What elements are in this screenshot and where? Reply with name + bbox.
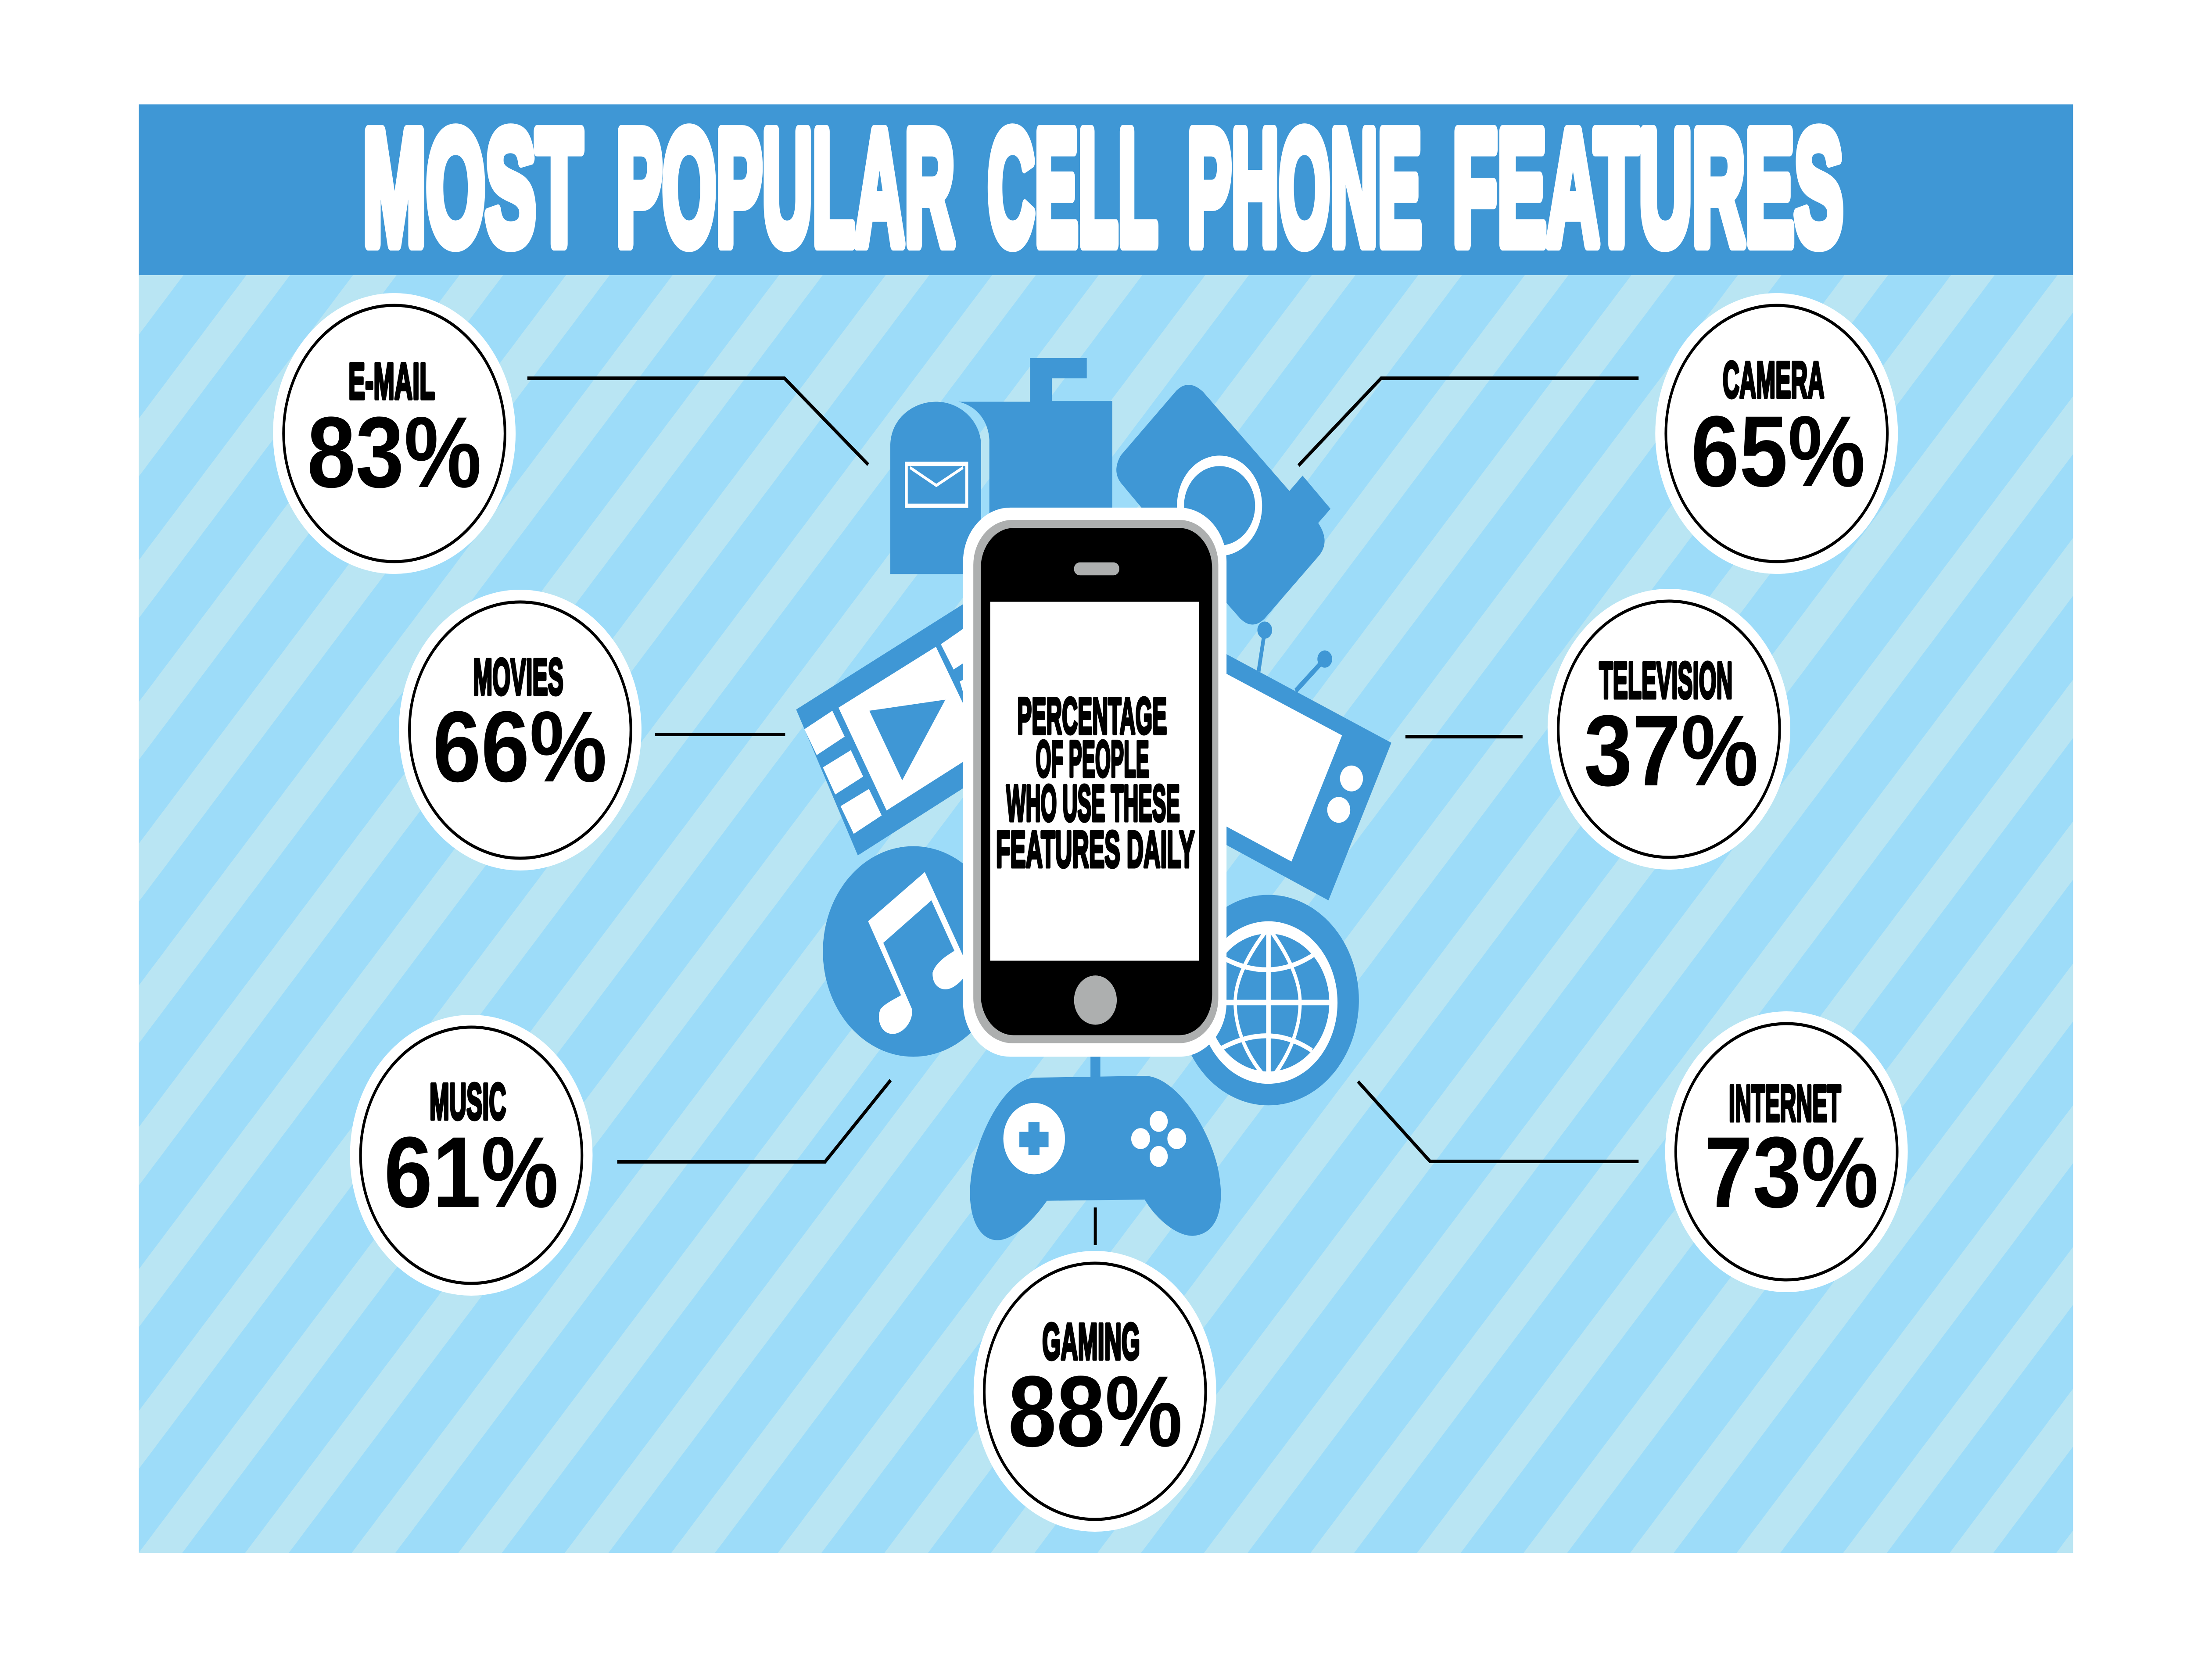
badge: e-mail 83%: [273, 293, 516, 574]
icon: television: [1219, 621, 1391, 900]
title: [363, 96, 1843, 279]
badge: gaming 88%: 88%: [1008, 1354, 1183, 1468]
phone: [963, 508, 1226, 1057]
header banner with title: [139, 96, 2073, 279]
phone screen text: PERCENTAGE: [1017, 688, 1167, 745]
badge: television 37%: 37%: [1584, 694, 1758, 807]
icon: music note: [823, 846, 1004, 1057]
icon: globe: [1178, 895, 1359, 1105]
connector lines: [527, 378, 1638, 1245]
title: CELL: [988, 96, 1158, 279]
badge: camera 65%: 65%: [1691, 394, 1865, 508]
title: MOST: [363, 96, 582, 279]
badge: e-mail 83%: 83%: [307, 395, 481, 509]
badge: gaming 88%: [974, 1251, 1216, 1532]
badge: television 37%: TELEVISION: [1599, 652, 1733, 709]
badge: television 37%: [1548, 589, 1790, 870]
central illustration: icons and phone: [796, 358, 1391, 1240]
phone screen text: OF PEOPLE: [1036, 731, 1149, 788]
panel: striped background: [139, 275, 2073, 1553]
title: FEATURES: [1452, 96, 1843, 279]
title: POPULAR: [616, 96, 955, 279]
badge: internet 73%: INTERNET: [1729, 1075, 1841, 1132]
badge: movies 66%: [399, 590, 642, 870]
badge: music 61%: MUSIC: [430, 1073, 506, 1131]
badge: internet 73%: [1665, 1011, 1908, 1292]
phone screen text: WHO USE THESE: [1006, 775, 1180, 832]
badge: music 61%: 61%: [384, 1115, 559, 1229]
badge: internet 73%: 73%: [1704, 1115, 1879, 1229]
phone screen text: [996, 688, 1194, 878]
badge: e-mail 83%: E-MAIL: [348, 353, 435, 410]
badge: camera 65%: [1655, 293, 1898, 574]
phone screen text: FEATURES DAILY: [996, 821, 1194, 878]
icon: mailbox: [890, 358, 1112, 574]
title: PHONE: [1187, 96, 1422, 279]
icon: game controller: [970, 1050, 1221, 1240]
badge: gaming 88%: GAMING: [1042, 1313, 1140, 1371]
badge: music 61%: [350, 1015, 592, 1296]
badge: movies 66%: MOVIES: [473, 648, 563, 706]
icon: video player: [796, 601, 969, 856]
icon: camera: [1116, 385, 1330, 624]
badge: camera 65%: CAMERA: [1723, 351, 1825, 409]
badge: movies 66%: 66%: [433, 690, 607, 803]
